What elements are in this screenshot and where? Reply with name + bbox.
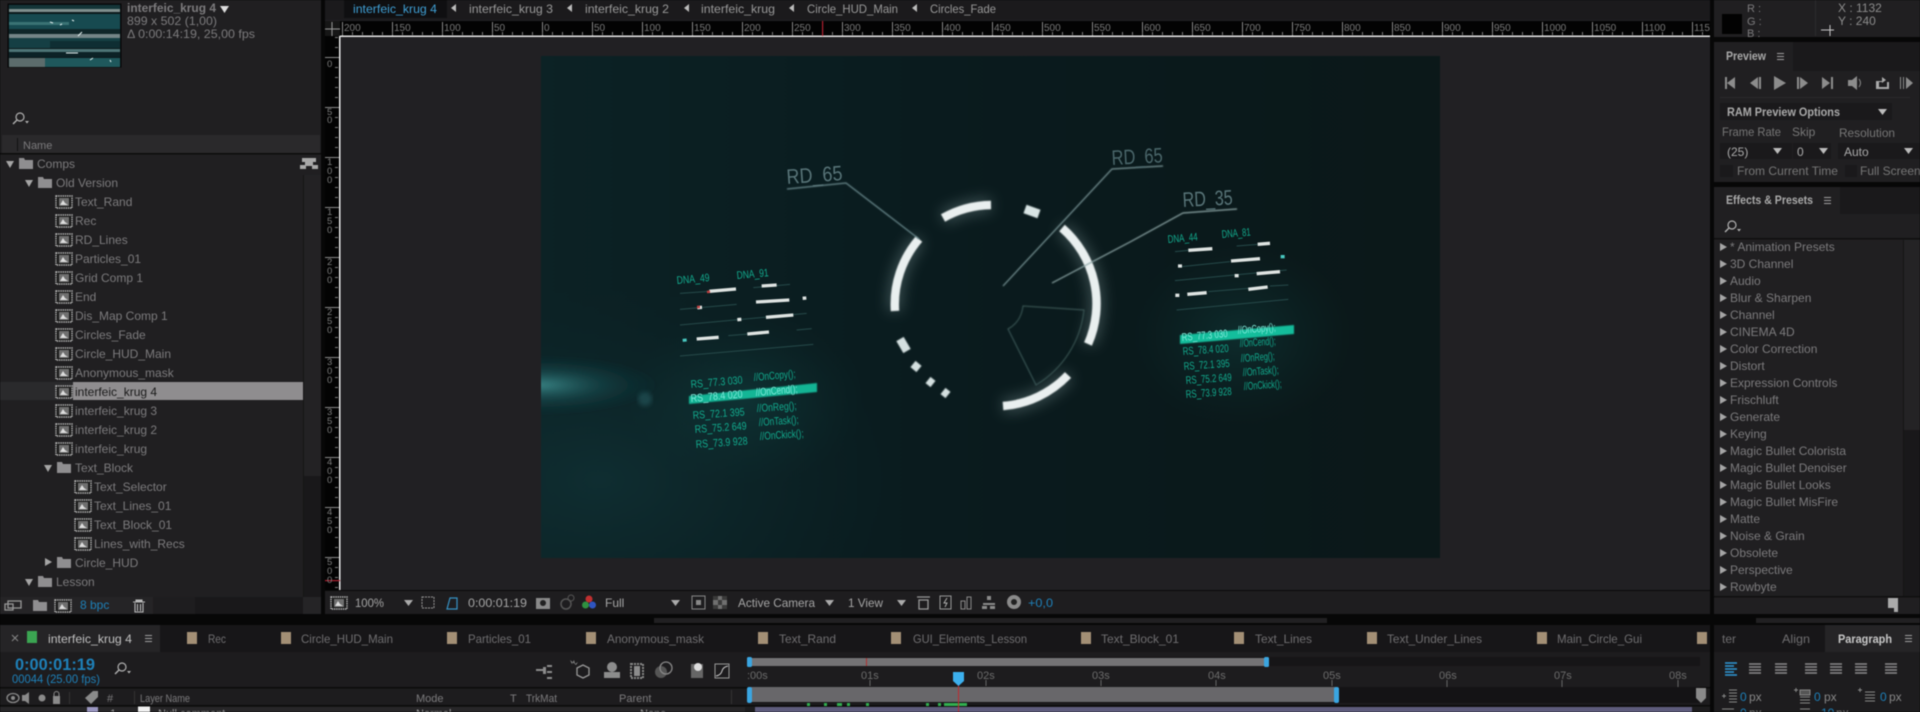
left data panel: DNA_49 xyxy=(676,272,710,287)
horizontal ruler: 50 xyxy=(594,23,606,34)
horizontal ruler: 1000 xyxy=(1544,23,1567,34)
effects scrollbar xyxy=(1903,240,1920,597)
panel: paragraph xyxy=(1714,625,1920,712)
horizontal ruler: 250 xyxy=(794,23,811,34)
vertical ruler: 0 xyxy=(327,566,332,577)
horizontal ruler: 1100 xyxy=(1644,23,1666,34)
project tree xyxy=(0,157,303,589)
right data panel: //OnReg(); xyxy=(1240,351,1275,365)
effects list: Generate xyxy=(1730,410,1780,424)
horizontal ruler: 950 xyxy=(1494,23,1511,34)
project tree: Old Version xyxy=(56,176,118,190)
project tree: interfeic_krug xyxy=(75,442,147,456)
viewer toolbar: Active Camera xyxy=(738,596,815,610)
horizontal ruler: 200 xyxy=(344,23,361,34)
viewer toolbar: Full xyxy=(605,596,624,610)
column header row: Mode xyxy=(416,693,444,705)
vertical ruler: 0 xyxy=(327,166,332,177)
panel: info: X : 1132 xyxy=(1838,1,1882,15)
search icon xyxy=(13,113,29,124)
horizontal ruler: 100 xyxy=(444,23,461,34)
effects list: Matte xyxy=(1730,512,1760,526)
timeline tabs xyxy=(10,630,1708,646)
horizontal ruler: 150 xyxy=(694,23,711,34)
right data panel: RS_72.1 395 xyxy=(1183,358,1230,373)
right data panel: RS_73.9 928 xyxy=(1185,386,1232,401)
panel: info xyxy=(1714,0,1920,40)
viewer tabs: Circle_HUD_Main xyxy=(807,2,898,16)
indent fields: 0 xyxy=(1880,690,1887,704)
RAM preview options: From Current Time xyxy=(1737,164,1838,178)
left data panel: RS_78.4 020 xyxy=(690,389,743,405)
RAM preview options: Full Screen xyxy=(1860,164,1920,178)
column header row: Parent xyxy=(619,693,651,705)
right data panel: RS_75.2 649 xyxy=(1185,372,1232,387)
code rows xyxy=(1180,325,1294,344)
left data panel: RS_72.1 395 xyxy=(692,406,745,422)
vertical ruler: 0 xyxy=(327,115,332,126)
left data panel: //OnCkick(); xyxy=(759,428,804,443)
vertical ruler xyxy=(325,21,340,590)
horizontal ruler: 800 xyxy=(1344,23,1361,34)
name column header: Name xyxy=(23,140,52,152)
viewer toolbar: +0,0 xyxy=(1028,596,1053,610)
column header row xyxy=(0,687,1710,706)
vertical ruler: 2 xyxy=(327,257,332,268)
callout label: RD_35: RD_35 xyxy=(1182,186,1233,212)
vertical ruler: 4 xyxy=(327,507,332,518)
left data panel: RS_75.2 649 xyxy=(694,420,747,436)
indent fields: px xyxy=(1824,690,1837,704)
column header row: T xyxy=(510,693,517,705)
right data panel: DNA_81 xyxy=(1221,227,1251,241)
indent fields xyxy=(1722,688,1902,712)
RAM preview options: Skip xyxy=(1792,125,1816,139)
time ruler: 08s xyxy=(1669,670,1687,682)
vertical ruler: 4 xyxy=(327,457,332,468)
RAM preview options: 0 xyxy=(1797,145,1804,159)
viewer toolbar: 1 View xyxy=(848,596,883,610)
viewer toolbar xyxy=(325,590,1710,614)
vertical ruler: 5 xyxy=(327,216,332,227)
effects list: Frischluft xyxy=(1730,393,1779,407)
current time xyxy=(12,655,100,686)
viewer toolbar: 0:00:01:19 xyxy=(468,596,527,610)
time ruler: 01s xyxy=(861,670,879,682)
vertical ruler: 0 xyxy=(327,475,332,486)
effects list: CINEMA 4D xyxy=(1730,325,1795,339)
right data panel: //OnCend(); xyxy=(1239,336,1276,350)
panel: effects and presets: Effects & Presets xyxy=(1726,193,1813,207)
timeline tabs: Text_Block_01 xyxy=(1101,632,1179,646)
horizontal ruler: 300 xyxy=(844,23,861,34)
layer bar xyxy=(755,707,1692,712)
timeline tabs: Circle_HUD_Main xyxy=(301,632,393,646)
effects list: Audio xyxy=(1730,274,1761,288)
callout label: RD_65 left: RD_65 xyxy=(786,162,843,189)
left data panel: //OnCend(); xyxy=(755,383,798,399)
project tree: Anonymous_mask xyxy=(75,366,175,380)
horizontal ruler: 750 xyxy=(1294,23,1311,34)
project tree: Circle_HUD_Main xyxy=(75,347,171,361)
viewer tabs: interfeic_krug 3 xyxy=(469,2,553,16)
vertical ruler: 0 xyxy=(327,366,332,377)
project tree: Dis_Map Comp 1 xyxy=(75,309,168,323)
column header row: # xyxy=(107,693,114,705)
viewer tabs: interfeic_krug 4 xyxy=(353,2,437,16)
effects list: Expression Controls xyxy=(1730,376,1837,390)
project tree: RD_Lines xyxy=(75,233,128,247)
left data panel xyxy=(676,267,817,451)
vertical ruler: 3 xyxy=(327,407,332,418)
effects list: * Animation Presets xyxy=(1730,240,1835,254)
horizontal ruler: 0 xyxy=(544,23,550,34)
horizontal ruler: 150 xyxy=(394,23,411,34)
RAM preview options: Auto xyxy=(1844,145,1869,159)
current time: 0:00:01:19 xyxy=(15,655,95,674)
composition canvas: HUD artwork xyxy=(540,56,1440,558)
project footer: 8 bpc xyxy=(80,598,109,612)
effects list: Noise & Grain xyxy=(1730,529,1805,543)
panel: info: G : xyxy=(1747,16,1762,28)
callout label: RD_65 right: RD_65 xyxy=(1111,144,1163,170)
flowchart icon xyxy=(300,158,318,169)
vertical ruler: 0 xyxy=(327,225,332,236)
effects list: Blur & Sharpen xyxy=(1730,291,1811,305)
horizontal ruler: 1050 xyxy=(1594,23,1617,34)
comp name and details: 899 x 502 (1,00) xyxy=(127,14,217,28)
vertical ruler: 5 xyxy=(327,316,332,327)
project tree: Lines_with_Recs xyxy=(94,537,185,551)
RAM preview options: RAM Preview Options xyxy=(1727,105,1840,119)
effects list: Distort xyxy=(1730,359,1765,373)
comp name and details: interfeic_krug 4 xyxy=(127,1,216,15)
viewer tabs xyxy=(325,0,1710,20)
vertical ruler: 0 xyxy=(327,466,332,477)
viewer tabs: interfeic_krug xyxy=(701,2,775,16)
RAM preview options: Frame Rate xyxy=(1722,125,1781,139)
horizontal ruler: 500 xyxy=(1044,23,1061,34)
vertical ruler: 0 xyxy=(327,325,332,336)
effects list: Magic Bullet Denoiser xyxy=(1730,461,1847,475)
project tree: Comps xyxy=(37,157,75,171)
horizontal ruler: 350 xyxy=(894,23,911,34)
project tree: Lesson xyxy=(56,575,95,589)
timeline tabs: Text_Under_Lines xyxy=(1387,632,1482,646)
time ruler: 02s xyxy=(977,670,995,682)
project tree: Grid Comp 1 xyxy=(75,271,143,285)
project tree: Rec xyxy=(75,214,96,228)
panel: info: B : xyxy=(1747,28,1760,40)
black gutter scroll strips xyxy=(654,618,1327,623)
current time: 00044 (25.00 fps) xyxy=(12,672,100,686)
effects list: Magic Bullet Colorista xyxy=(1730,444,1846,458)
right data panel: RS_77.3 030 xyxy=(1181,328,1228,344)
RAM preview options: (25) xyxy=(1727,145,1748,159)
transport controls xyxy=(1725,76,1913,90)
project tree: Circles_Fade xyxy=(75,328,146,342)
RAM preview options xyxy=(1720,103,1920,178)
right data panel: //OnCkick(); xyxy=(1243,378,1282,393)
horizontal ruler: 900 xyxy=(1444,23,1461,34)
RAM preview options: Resolution xyxy=(1839,126,1895,140)
time ruler: :00s xyxy=(747,670,768,682)
vertical ruler: 0 xyxy=(327,575,332,586)
effects list: Rowbyte xyxy=(1730,580,1777,594)
project tree: Circle_HUD xyxy=(75,556,139,570)
playhead xyxy=(953,672,964,712)
horizontal ruler: 400 xyxy=(944,23,961,34)
vertical ruler: 5 xyxy=(327,416,332,427)
name column header xyxy=(0,135,321,154)
paragraph tabs: ter xyxy=(1722,632,1736,646)
lens flare xyxy=(540,362,653,408)
work area bar xyxy=(747,687,1706,703)
paragraph tabs: Align xyxy=(1782,632,1810,646)
horizontal ruler: 100 xyxy=(644,23,661,34)
project tree: Text_Selector xyxy=(94,480,167,494)
effects list: 3D Channel xyxy=(1730,257,1793,271)
horizontal ruler: 200 xyxy=(744,23,761,34)
comp name and details: Δ 0:00:14:19, 25,00 fps xyxy=(127,27,255,41)
vertical ruler: 1 xyxy=(327,207,332,218)
indent fields: 0 xyxy=(1814,690,1821,704)
timeline tabs: Anonymous_mask xyxy=(607,632,705,646)
column header row: Layer Name xyxy=(140,693,190,705)
vertical ruler: 0 xyxy=(327,59,332,70)
panel: info: R : xyxy=(1747,3,1761,15)
horizontal ruler: 550 xyxy=(1094,23,1111,34)
timeline tabs: Text_Lines xyxy=(1255,632,1312,646)
effects list: Channel xyxy=(1730,308,1775,322)
effects list: Perspective xyxy=(1730,563,1793,577)
horizontal ruler: 450 xyxy=(994,23,1011,34)
effects list: Magic Bullet MisFire xyxy=(1730,495,1838,509)
horizontal ruler: 700 xyxy=(1244,23,1261,34)
panel: timeline xyxy=(0,625,1710,712)
effects list: Keying xyxy=(1730,427,1767,441)
project tree: Text_Lines_01 xyxy=(94,499,172,513)
timeline search xyxy=(115,663,131,674)
panel: project xyxy=(0,0,321,614)
horizontal ruler: 850 xyxy=(1394,23,1411,34)
first layer row xyxy=(0,706,745,712)
time ruler: 04s xyxy=(1208,670,1226,682)
time ruler: 07s xyxy=(1554,670,1572,682)
panel: effects and presets xyxy=(1714,187,1920,614)
effects list: Obsolete xyxy=(1730,546,1778,560)
right data panel: //OnCopy(); xyxy=(1237,322,1276,337)
vertical ruler: 5 xyxy=(327,557,332,568)
comp name and details xyxy=(127,1,255,41)
vertical ruler: 5 xyxy=(327,107,332,118)
indent fields: 0 xyxy=(1740,690,1747,704)
time navigator bar xyxy=(746,656,1270,668)
horizontal ruler xyxy=(325,21,1716,37)
project tree: Text_Rand xyxy=(75,195,132,209)
time ruler: 06s xyxy=(1439,670,1457,682)
indent fields: px xyxy=(1749,690,1762,704)
project tree: Particles_01 xyxy=(75,252,141,266)
panel: info: Y : 240 xyxy=(1838,14,1876,28)
markers xyxy=(807,703,967,706)
right data panel xyxy=(1167,227,1294,401)
horizontal ruler: 650 xyxy=(1194,23,1211,34)
horizontal ruler: 50 xyxy=(494,23,506,34)
left data panel: //OnTask(); xyxy=(758,414,799,429)
viewer tabs: interfeic_krug 2 xyxy=(585,2,669,16)
search icon xyxy=(1725,221,1741,232)
viewer toolbar: 100% xyxy=(355,596,384,610)
callout lines and sector xyxy=(787,166,1237,385)
effects list: Magic Bullet Looks xyxy=(1730,478,1831,492)
alignment buttons xyxy=(1725,663,1897,675)
horizontal ruler: 600 xyxy=(1144,23,1161,34)
effects list xyxy=(1720,240,1847,594)
left data panel: DNA_91 xyxy=(736,267,769,282)
panel: composition viewer xyxy=(324,0,1711,614)
vertical ruler: 0 xyxy=(327,525,332,536)
project footer xyxy=(0,597,321,614)
time ruler: 05s xyxy=(1323,670,1341,682)
timeline tabs: Particles_01 xyxy=(468,632,531,646)
new preset icon xyxy=(1888,598,1898,612)
indent fields: px xyxy=(1889,690,1902,704)
project tree: Text_Block xyxy=(75,461,134,475)
viewer tabs: Circles_Fade xyxy=(930,2,996,16)
vertical ruler: 5 xyxy=(327,516,332,527)
right data panel: DNA_44 xyxy=(1167,231,1198,246)
right data panel: RS_78.4 020 xyxy=(1182,343,1229,358)
timeline tabs: interfeic_krug 4 xyxy=(48,632,132,646)
time ruler xyxy=(748,671,1687,688)
thumbnail preview xyxy=(8,4,121,67)
vertical ruler: 3 xyxy=(327,357,332,368)
timeline tabs: Text_Rand xyxy=(779,632,836,646)
left data panel: RS_73.9 928 xyxy=(695,435,748,451)
paragraph tabs: Paragraph xyxy=(1838,632,1892,646)
vertical ruler: 0 xyxy=(327,266,332,277)
vertical ruler: 0 xyxy=(327,275,332,286)
paragraph tabs xyxy=(1722,633,1913,646)
vertical ruler: 0 xyxy=(327,425,332,436)
time ruler: 03s xyxy=(1092,670,1110,682)
circular HUD ring xyxy=(895,205,1097,406)
project tree: End xyxy=(75,290,96,304)
vertical ruler: 2 xyxy=(327,307,332,318)
timeline tabs: Main_Circle_Gui xyxy=(1557,632,1642,646)
project tree: interfeic_krug 4 xyxy=(75,385,157,399)
left data panel: //OnReg(); xyxy=(756,400,797,415)
project scrollbar xyxy=(303,175,321,597)
effects list: Color Correction xyxy=(1730,342,1817,356)
panel: preview: Preview xyxy=(1726,49,1767,63)
vertical ruler: 0 xyxy=(327,375,332,386)
timeline tabs: Rec xyxy=(208,632,226,646)
project tree: Text_Block_01 xyxy=(94,518,172,532)
project tree: interfeic_krug 2 xyxy=(75,423,157,437)
project tree: interfeic_krug 3 xyxy=(75,404,157,418)
vertical ruler: 1 xyxy=(327,157,332,168)
timeline toolbar icons xyxy=(536,660,729,679)
right data panel: //OnTask(); xyxy=(1242,365,1279,379)
timeline tabs: GUI_Elements_Lesson xyxy=(913,632,1027,646)
left data panel: //OnCopy(); xyxy=(753,368,796,384)
left data panel: RS_77.3 030 xyxy=(690,375,743,391)
vertical ruler: 0 xyxy=(327,175,332,186)
horizontal ruler: 1150 xyxy=(1694,23,1716,34)
column header row: TrkMat xyxy=(526,693,557,705)
panel: preview xyxy=(1714,42,1920,182)
code rows xyxy=(689,383,817,404)
